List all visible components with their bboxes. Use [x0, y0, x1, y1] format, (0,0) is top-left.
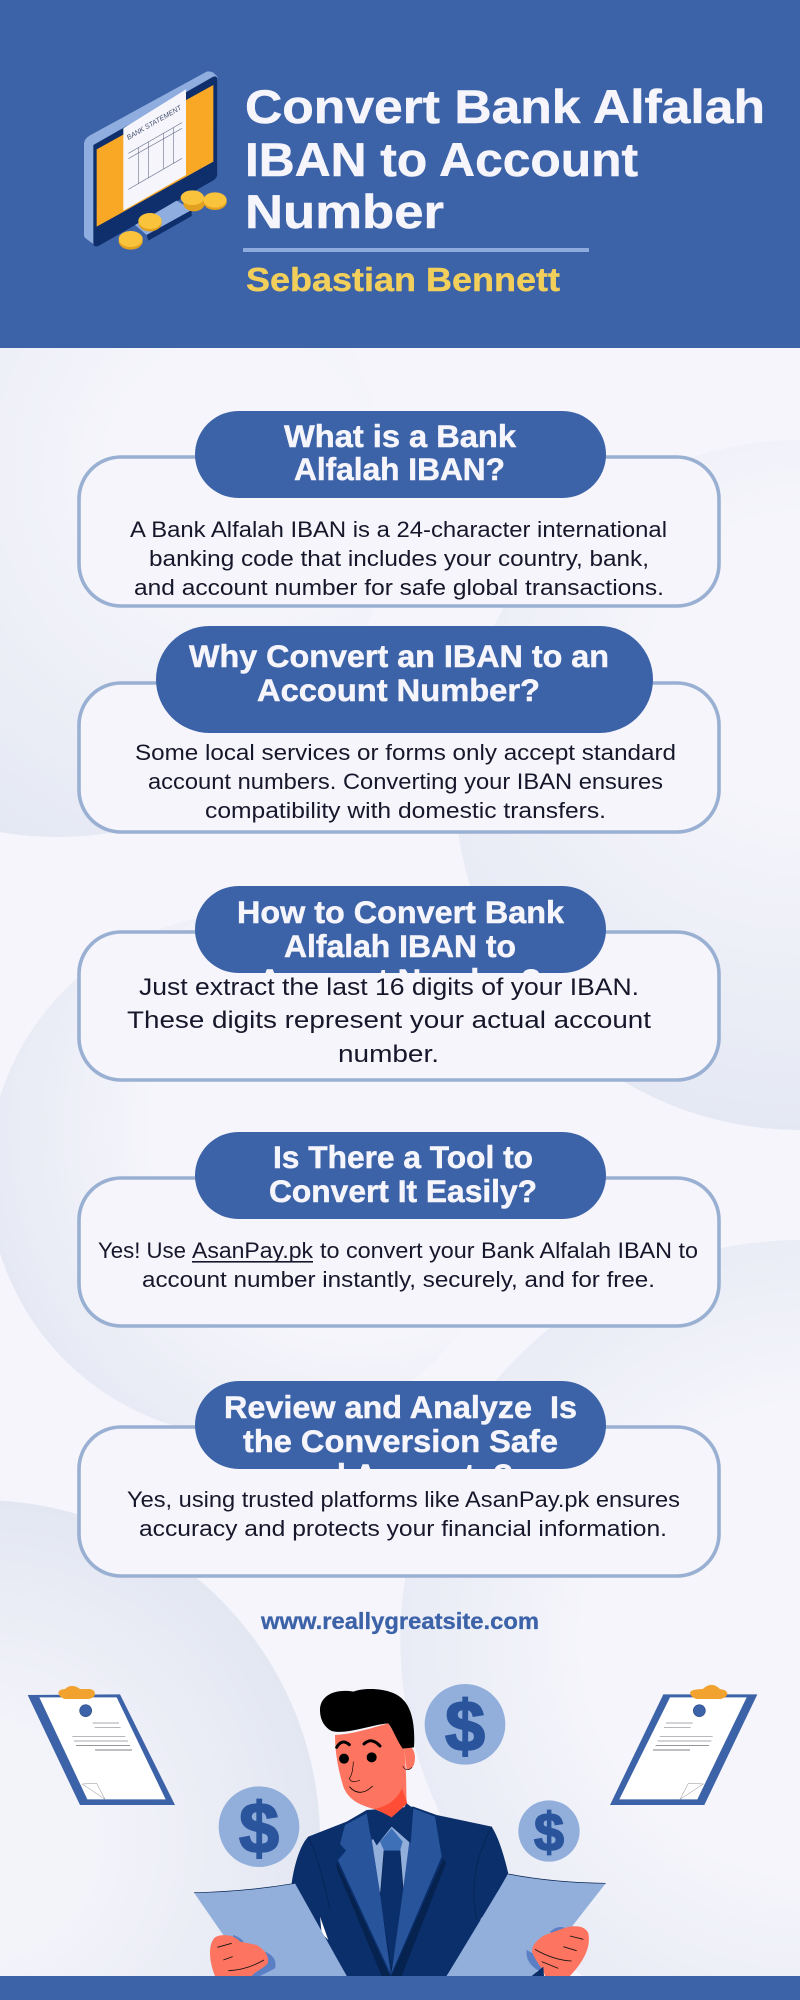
icon: dollar coin left: $: [239, 1789, 279, 1869]
author name: Sebastian Bennett: [246, 261, 560, 298]
body text: AsanPay.pk: [192, 1238, 314, 1263]
title: [245, 80, 765, 238]
papers and hands: [194, 1874, 606, 1976]
body text: banking code that includes your country, bank,: [149, 546, 649, 571]
body text: accuracy and protects your financial information.: [139, 1516, 667, 1541]
icon: dollar coin left: [219, 1786, 299, 1869]
illustration: man in suit reading papers with dollar coins: [194, 1684, 606, 1976]
body text: [127, 1487, 680, 1541]
panel: is there a tool: [79, 1132, 719, 1326]
panel: how to convert: [79, 886, 719, 1080]
body text: These digits represent your actual account: [127, 1007, 651, 1034]
heading pill: Why Convert an IBAN to an: [189, 638, 609, 674]
website url: www.reallygreatsite.com: [260, 1608, 539, 1634]
heading pill: Account Number?: [257, 672, 540, 708]
heading pill: [156, 626, 653, 733]
man figure: [292, 1689, 508, 1976]
title: IBAN to Account: [245, 133, 638, 186]
heading pill: the Conversion Safe: [243, 1423, 558, 1459]
panel: why convert: [79, 626, 719, 832]
footer band: [0, 1976, 800, 2000]
heading pill: Alfalah IBAN to: [284, 928, 516, 964]
panel: what is a Bank Alfalah IBAN: [79, 411, 719, 606]
body text: Some local services or forms only accept standard: [135, 740, 676, 765]
heading pill: [195, 411, 606, 498]
body text: compatibility with domestic transfers.: [205, 798, 606, 823]
heading pill: What is a Bank: [284, 418, 516, 454]
heading pill: Convert It Easily?: [269, 1173, 537, 1209]
body text: [127, 974, 651, 1068]
body text: A Bank Alfalah IBAN is a 24-character international: [130, 517, 667, 542]
heading pill: [195, 1381, 606, 1469]
panel: review and analyze: [79, 1381, 719, 1576]
heading pill: Is There a Tool to: [273, 1139, 533, 1175]
body text: and account number for safe global transactions.: [134, 575, 664, 600]
heading pill: Review and Analyze Is: [224, 1389, 577, 1425]
body text: Yes, using trusted platforms like AsanPay.pk ensures: [127, 1487, 680, 1512]
body text: Yes! Use: [98, 1238, 186, 1263]
body text: number.: [338, 1041, 439, 1068]
body text: account numbers. Converting your IBAN ensures: [148, 769, 663, 794]
icon: dollar coin right: $: [534, 1803, 564, 1863]
icon: dollar coin top: [425, 1684, 505, 1766]
title: Convert Bank Alfalah: [245, 80, 765, 133]
heading pill: Alfalah IBAN?: [294, 451, 505, 487]
heading pill: [195, 886, 606, 973]
body text: [98, 1238, 698, 1292]
body text: to convert your Bank Alfalah IBAN to: [320, 1238, 698, 1263]
heading pill: Account Number?: [258, 962, 541, 998]
title: Number: [245, 185, 444, 238]
icon: right clipboard: [610, 1685, 757, 1805]
heading pill: How to Convert Bank: [237, 894, 564, 930]
heading pill: and Accurate?: [288, 1457, 513, 1493]
header band: [0, 0, 800, 348]
body text: [130, 517, 667, 600]
statement text: BANK STATEMENT: [126, 104, 184, 142]
icon: left clipboard: [28, 1686, 175, 1805]
body text: Just extract the last 16 digits of your IBAN.: [139, 974, 639, 1001]
heading pill: [195, 1132, 606, 1219]
body text: [135, 740, 676, 823]
icon: monitor with bank statement and coins: [84, 71, 227, 250]
icon: dollar coin right: [518, 1800, 580, 1863]
body text: account number instantly, securely, and for free.: [142, 1267, 655, 1292]
icon: dollar coin top: $: [445, 1686, 485, 1766]
